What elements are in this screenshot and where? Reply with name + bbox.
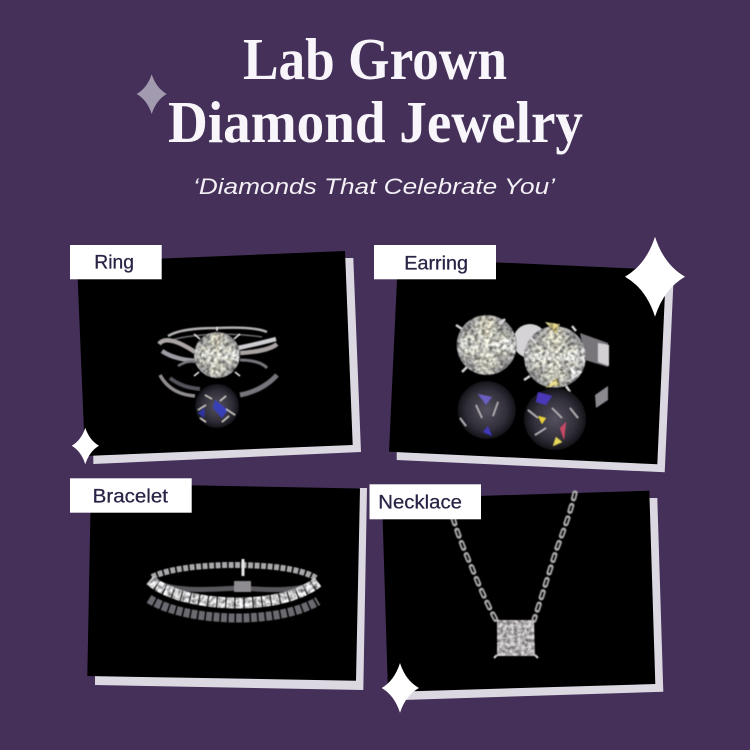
photo: black ground bbox=[382, 491, 655, 692]
photo: black ground bbox=[77, 251, 353, 456]
ring illustration bbox=[159, 327, 277, 428]
icon: sparkle near necklace bbox=[382, 663, 419, 713]
title: Lab Grown bbox=[243, 26, 507, 92]
necklace pendant bbox=[497, 620, 535, 656]
label: bracelet bbox=[70, 478, 192, 513]
ring diamond bbox=[194, 332, 240, 378]
icon: grey sparkle bbox=[137, 74, 167, 114]
label: earring bbox=[374, 245, 496, 279]
label: necklace: Necklace bbox=[378, 492, 462, 513]
label: earring: Earring bbox=[404, 254, 468, 274]
earring reflections bbox=[458, 381, 586, 450]
photo backing bbox=[397, 270, 674, 472]
label: necklace bbox=[370, 484, 481, 519]
panel: earring bbox=[389, 237, 685, 472]
icon: sparkle near ring bbox=[72, 428, 99, 464]
panel: bracelet bbox=[87, 484, 367, 690]
earring illustration bbox=[456, 315, 609, 450]
label: bracelet: Bracelet bbox=[93, 486, 169, 507]
label: ring: Ring bbox=[94, 252, 134, 273]
bracelet illustration bbox=[149, 559, 318, 618]
panel: ring bbox=[77, 251, 361, 464]
title: Diamond Jewelry bbox=[168, 89, 583, 155]
label: ring bbox=[70, 245, 162, 279]
photo backing bbox=[95, 488, 367, 690]
ring reflection bbox=[195, 384, 239, 428]
photo backing bbox=[93, 258, 361, 464]
panel: necklace bbox=[382, 491, 663, 700]
title bbox=[168, 26, 583, 155]
necklace illustration bbox=[453, 493, 575, 658]
earring diamonds bbox=[457, 315, 586, 388]
photo backing bbox=[403, 498, 663, 700]
icon: large sparkle bbox=[625, 237, 685, 317]
photo: black ground bbox=[389, 258, 666, 464]
subtitle: ‘Diamonds That Celebrate You’ bbox=[193, 174, 556, 199]
photo: black ground bbox=[87, 484, 360, 681]
